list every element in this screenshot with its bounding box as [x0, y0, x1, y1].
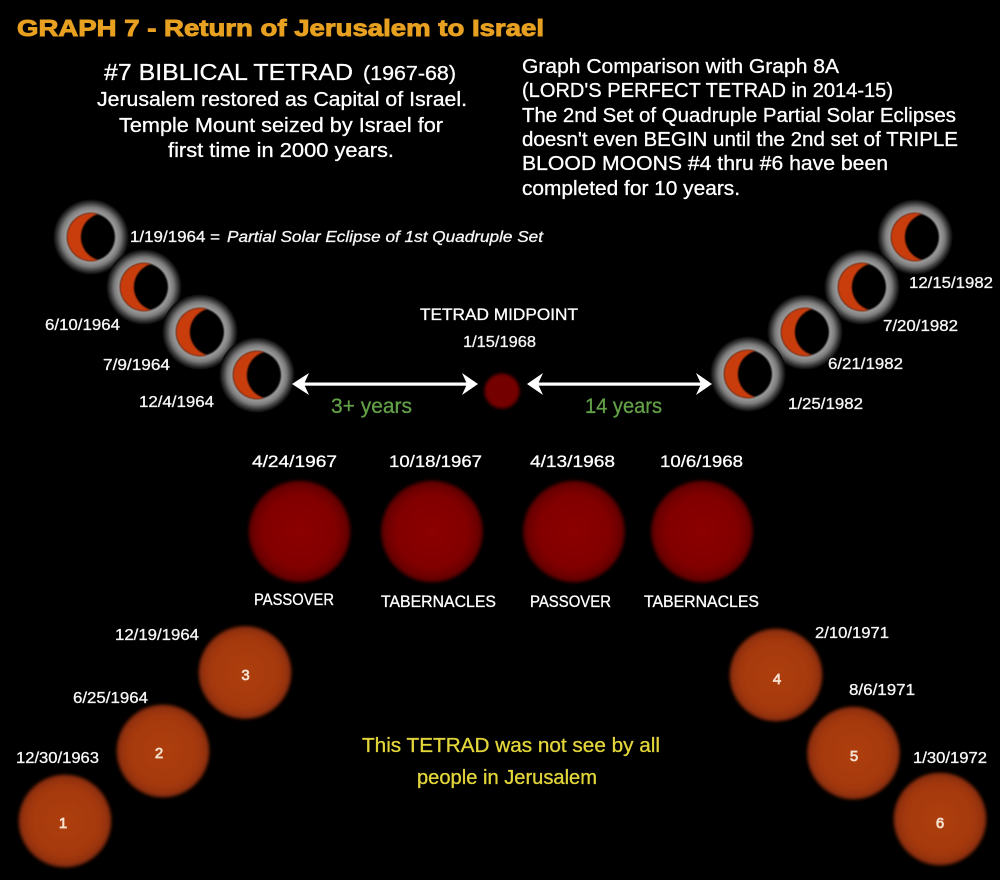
text block: tetrad description: (1967-68) — [363, 63, 456, 85]
moon 1 — [18, 774, 112, 868]
text block: graph comparison: doesn't even BEGIN until the 2nd set of TRIPLE — [522, 129, 958, 151]
solar eclipse 7/20/1982 — [824, 249, 900, 325]
midpoint moon — [484, 374, 520, 408]
eclipse date labels: 6/21/1982 — [828, 356, 903, 373]
moon date labels: 8/6/1971 — [849, 682, 915, 699]
tetrad midpoint label: 1/15/1968 — [463, 334, 536, 351]
solar eclipse 1/19/1964 — [53, 199, 129, 275]
text block: graph comparison — [522, 56, 958, 200]
tetrad date labels: 10/6/1968 — [660, 452, 743, 471]
text block: tetrad description: Temple Mount seized by Israel for — [119, 115, 443, 137]
tetrad date labels: 10/18/1967 — [389, 452, 482, 471]
text block: graph comparison: Graph Comparison with Graph 8A — [522, 56, 840, 78]
solar eclipse 12/15/1982 — [877, 199, 953, 275]
moon 3 — [198, 626, 292, 719]
eclipse date labels: 12/4/1964 — [139, 394, 214, 411]
moon 2: 2 — [155, 745, 163, 762]
note: tetrad not seen — [362, 735, 660, 789]
blood moon 2 — [381, 480, 483, 582]
label: 14 years: 14 years — [585, 395, 662, 418]
tetrad date labels — [252, 452, 743, 471]
feast labels: TABERNACLES — [644, 592, 759, 611]
moon 5: 5 — [850, 748, 858, 765]
feast labels: PASSOVER — [254, 590, 334, 609]
eclipse date labels: 6/10/1964 — [45, 317, 120, 334]
blood moon 3 — [523, 480, 625, 582]
blood moon 1 — [248, 480, 350, 582]
moon 6: 6 — [936, 815, 944, 832]
note: tetrad not seen: people in Jerusalem — [417, 767, 597, 789]
eclipse date labels: 12/15/1982 — [909, 275, 993, 292]
solar eclipse 7/9/1964 — [162, 294, 238, 370]
title: GRAPH 7 - Return of Jerusalem to Israel — [17, 15, 544, 41]
moon date labels: 1/30/1972 — [913, 750, 987, 767]
moon 4: 4 — [773, 671, 781, 688]
moon date labels: 12/19/1964 — [115, 627, 199, 644]
label: 3+ years: 3+ years — [331, 395, 412, 418]
text block: tetrad description: #7 BIBLICAL TETRAD — [104, 59, 353, 85]
text block: graph comparison: (LORD'S PERFECT TETRAD in 2014-15) — [522, 80, 893, 102]
eclipse date labels: 1/25/1982 — [788, 396, 863, 413]
moon 3: 3 — [241, 667, 250, 684]
moon 2 — [116, 704, 210, 798]
eclipse date labels — [45, 275, 993, 413]
feast labels — [254, 590, 759, 611]
moon 5 — [807, 706, 900, 800]
solar eclipse 12/4/1964 — [219, 337, 295, 413]
text block: tetrad description — [97, 59, 467, 162]
eclipse date labels: 7/9/1964 — [103, 357, 170, 374]
tetrad date labels: 4/24/1967 — [252, 452, 337, 471]
solar eclipse 6/10/1964 — [106, 249, 182, 325]
tetrad date labels: 4/13/1968 — [530, 452, 615, 471]
feast labels: TABERNACLES — [381, 592, 496, 611]
moon 1: 1 — [59, 815, 67, 832]
note: tetrad not seen: This TETRAD was not see by all — [362, 735, 660, 757]
tetrad midpoint label — [420, 305, 578, 351]
tetrad midpoint label: TETRAD MIDPOINT — [420, 305, 578, 324]
moon date labels: 12/30/1963 — [16, 750, 99, 767]
moon 4 — [730, 628, 822, 722]
moon date labels — [16, 625, 987, 767]
arrow: 3+ years — [292, 373, 478, 395]
feast labels: PASSOVER — [530, 592, 611, 611]
eclipse caption: first set: 1/19/1964 = — [130, 229, 220, 246]
moon 6 — [894, 772, 986, 866]
moon date labels: 2/10/1971 — [815, 625, 889, 642]
text block: graph comparison: completed for 10 years. — [522, 178, 740, 200]
eclipse caption: first set: Partial Solar Eclipse of 1st Quadruple Set — [227, 229, 544, 246]
solar eclipse 6/21/1982 — [767, 294, 843, 370]
text block: tetrad description: Jerusalem restored as Capital of Israel. — [97, 89, 467, 111]
text block: graph comparison: BLOOD MOONS #4 thru #6 have been — [522, 153, 888, 175]
solar eclipse 1/25/1982 — [710, 336, 786, 412]
arrow: 14 years — [527, 373, 712, 395]
blood moon 4 — [651, 480, 753, 582]
eclipse date labels: 7/20/1982 — [883, 318, 958, 335]
moon date labels: 6/25/1964 — [73, 690, 148, 707]
text block: graph comparison: The 2nd Set of Quadruple Partial Solar Eclipses — [522, 105, 956, 127]
text block: tetrad description: first time in 2000 years. — [168, 140, 394, 162]
